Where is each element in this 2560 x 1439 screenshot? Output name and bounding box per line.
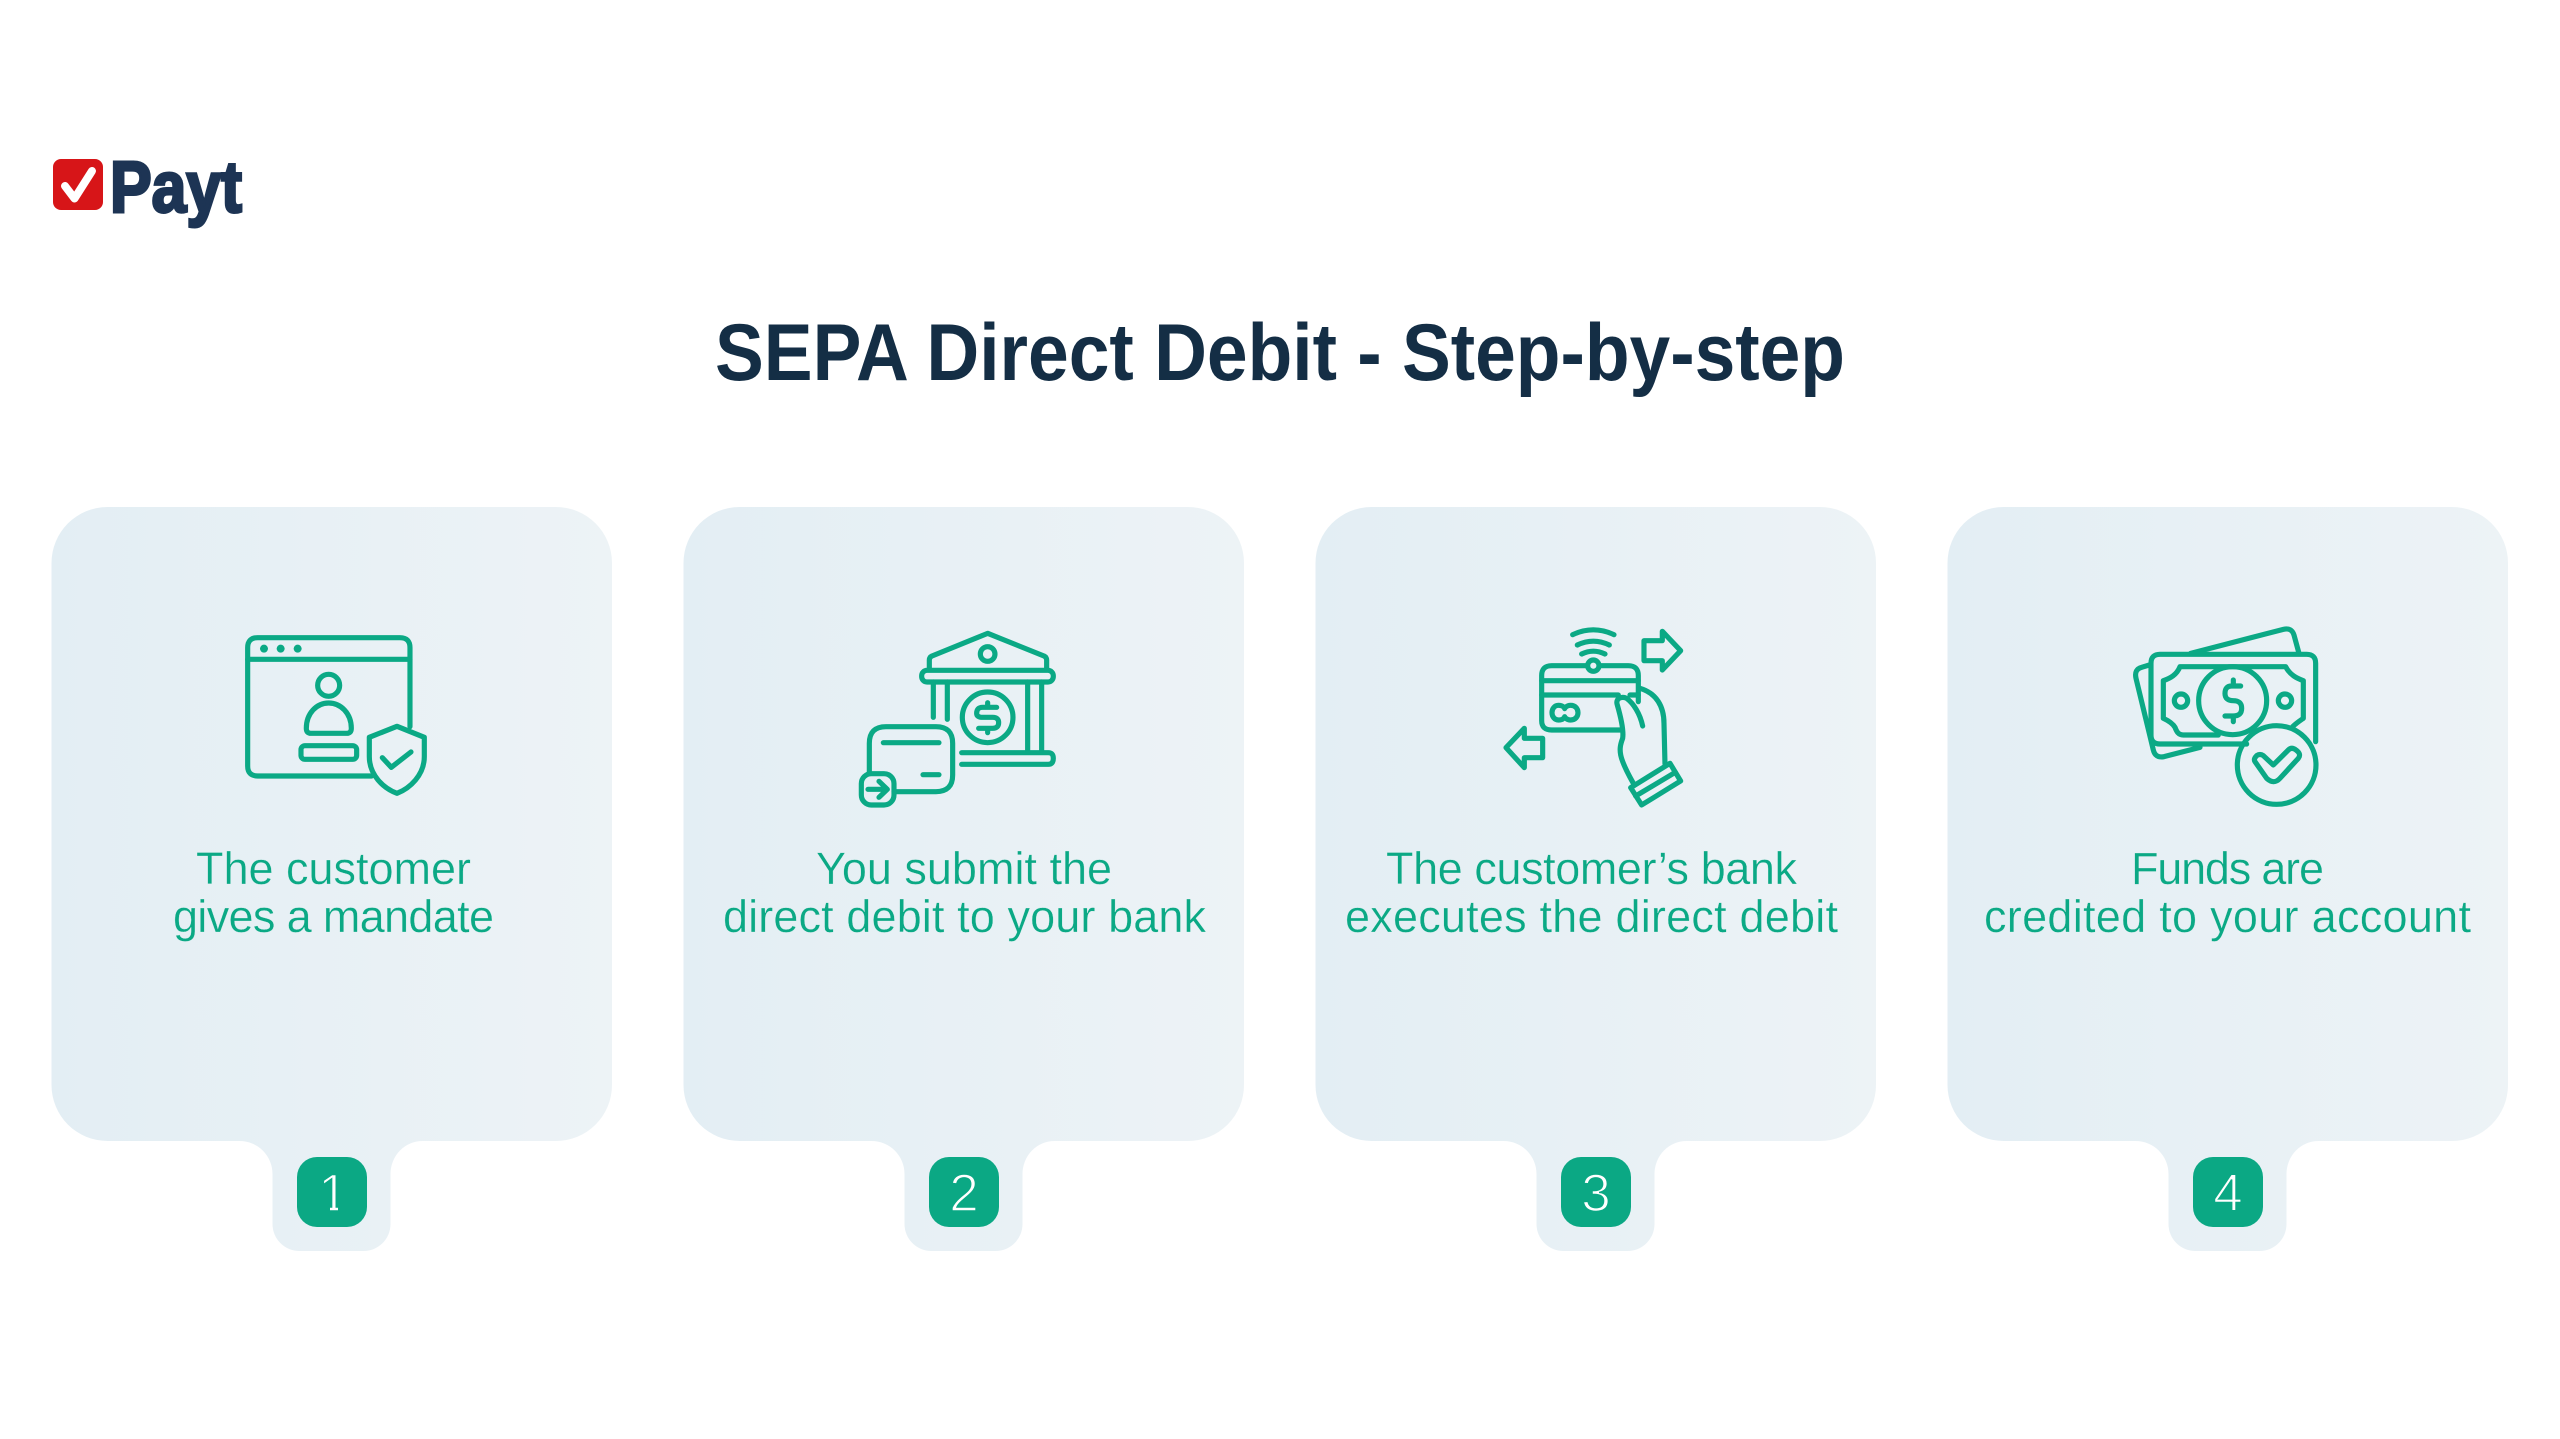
icon: hand holding contactless card with arrows <box>1506 630 1681 805</box>
title: SEPA Direct Debit - Step-by-step <box>715 308 1845 398</box>
panel: step 2 <box>684 507 1244 1251</box>
text: step 1 <box>173 843 494 942</box>
text: step 1: The customer <box>196 843 471 894</box>
badge: 3 <box>1561 1157 1631 1227</box>
text: step 4: credited to your account <box>1984 891 2471 942</box>
badge: 2 <box>929 1157 999 1227</box>
badge: 3: 3 <box>1581 1164 1611 1223</box>
panel: step 4 <box>1948 507 2508 1251</box>
badge: 4: 4 <box>2213 1164 2243 1223</box>
icon: browser window with user and shield <box>248 638 424 793</box>
icon: bank with card and arrow <box>861 633 1053 805</box>
text: step 3 <box>1345 843 1838 942</box>
icon: banknotes with check mark <box>2136 629 2316 804</box>
text: step 2 <box>723 843 1206 942</box>
panel: step 1 <box>52 507 612 1251</box>
text: step 2: You submit the <box>816 843 1112 894</box>
text: step 4: Funds are <box>2131 843 2324 894</box>
text: step 1: gives a mandate <box>173 891 494 942</box>
text: step 2: direct debit to your bank <box>723 891 1206 942</box>
logo: Payt <box>53 148 242 228</box>
text: step 3: executes the direct debit <box>1345 891 1838 942</box>
badge: 4 <box>2193 1157 2263 1227</box>
panel: step 3 <box>1316 507 1876 1251</box>
badge: 1: 1 <box>318 1164 348 1223</box>
logo: Payt: Payt <box>110 148 242 228</box>
badge: 1 <box>297 1157 367 1227</box>
text: step 3: The customer’s bank <box>1386 843 1798 894</box>
badge: 2: 2 <box>949 1164 979 1223</box>
text: step 4 <box>1984 843 2471 942</box>
